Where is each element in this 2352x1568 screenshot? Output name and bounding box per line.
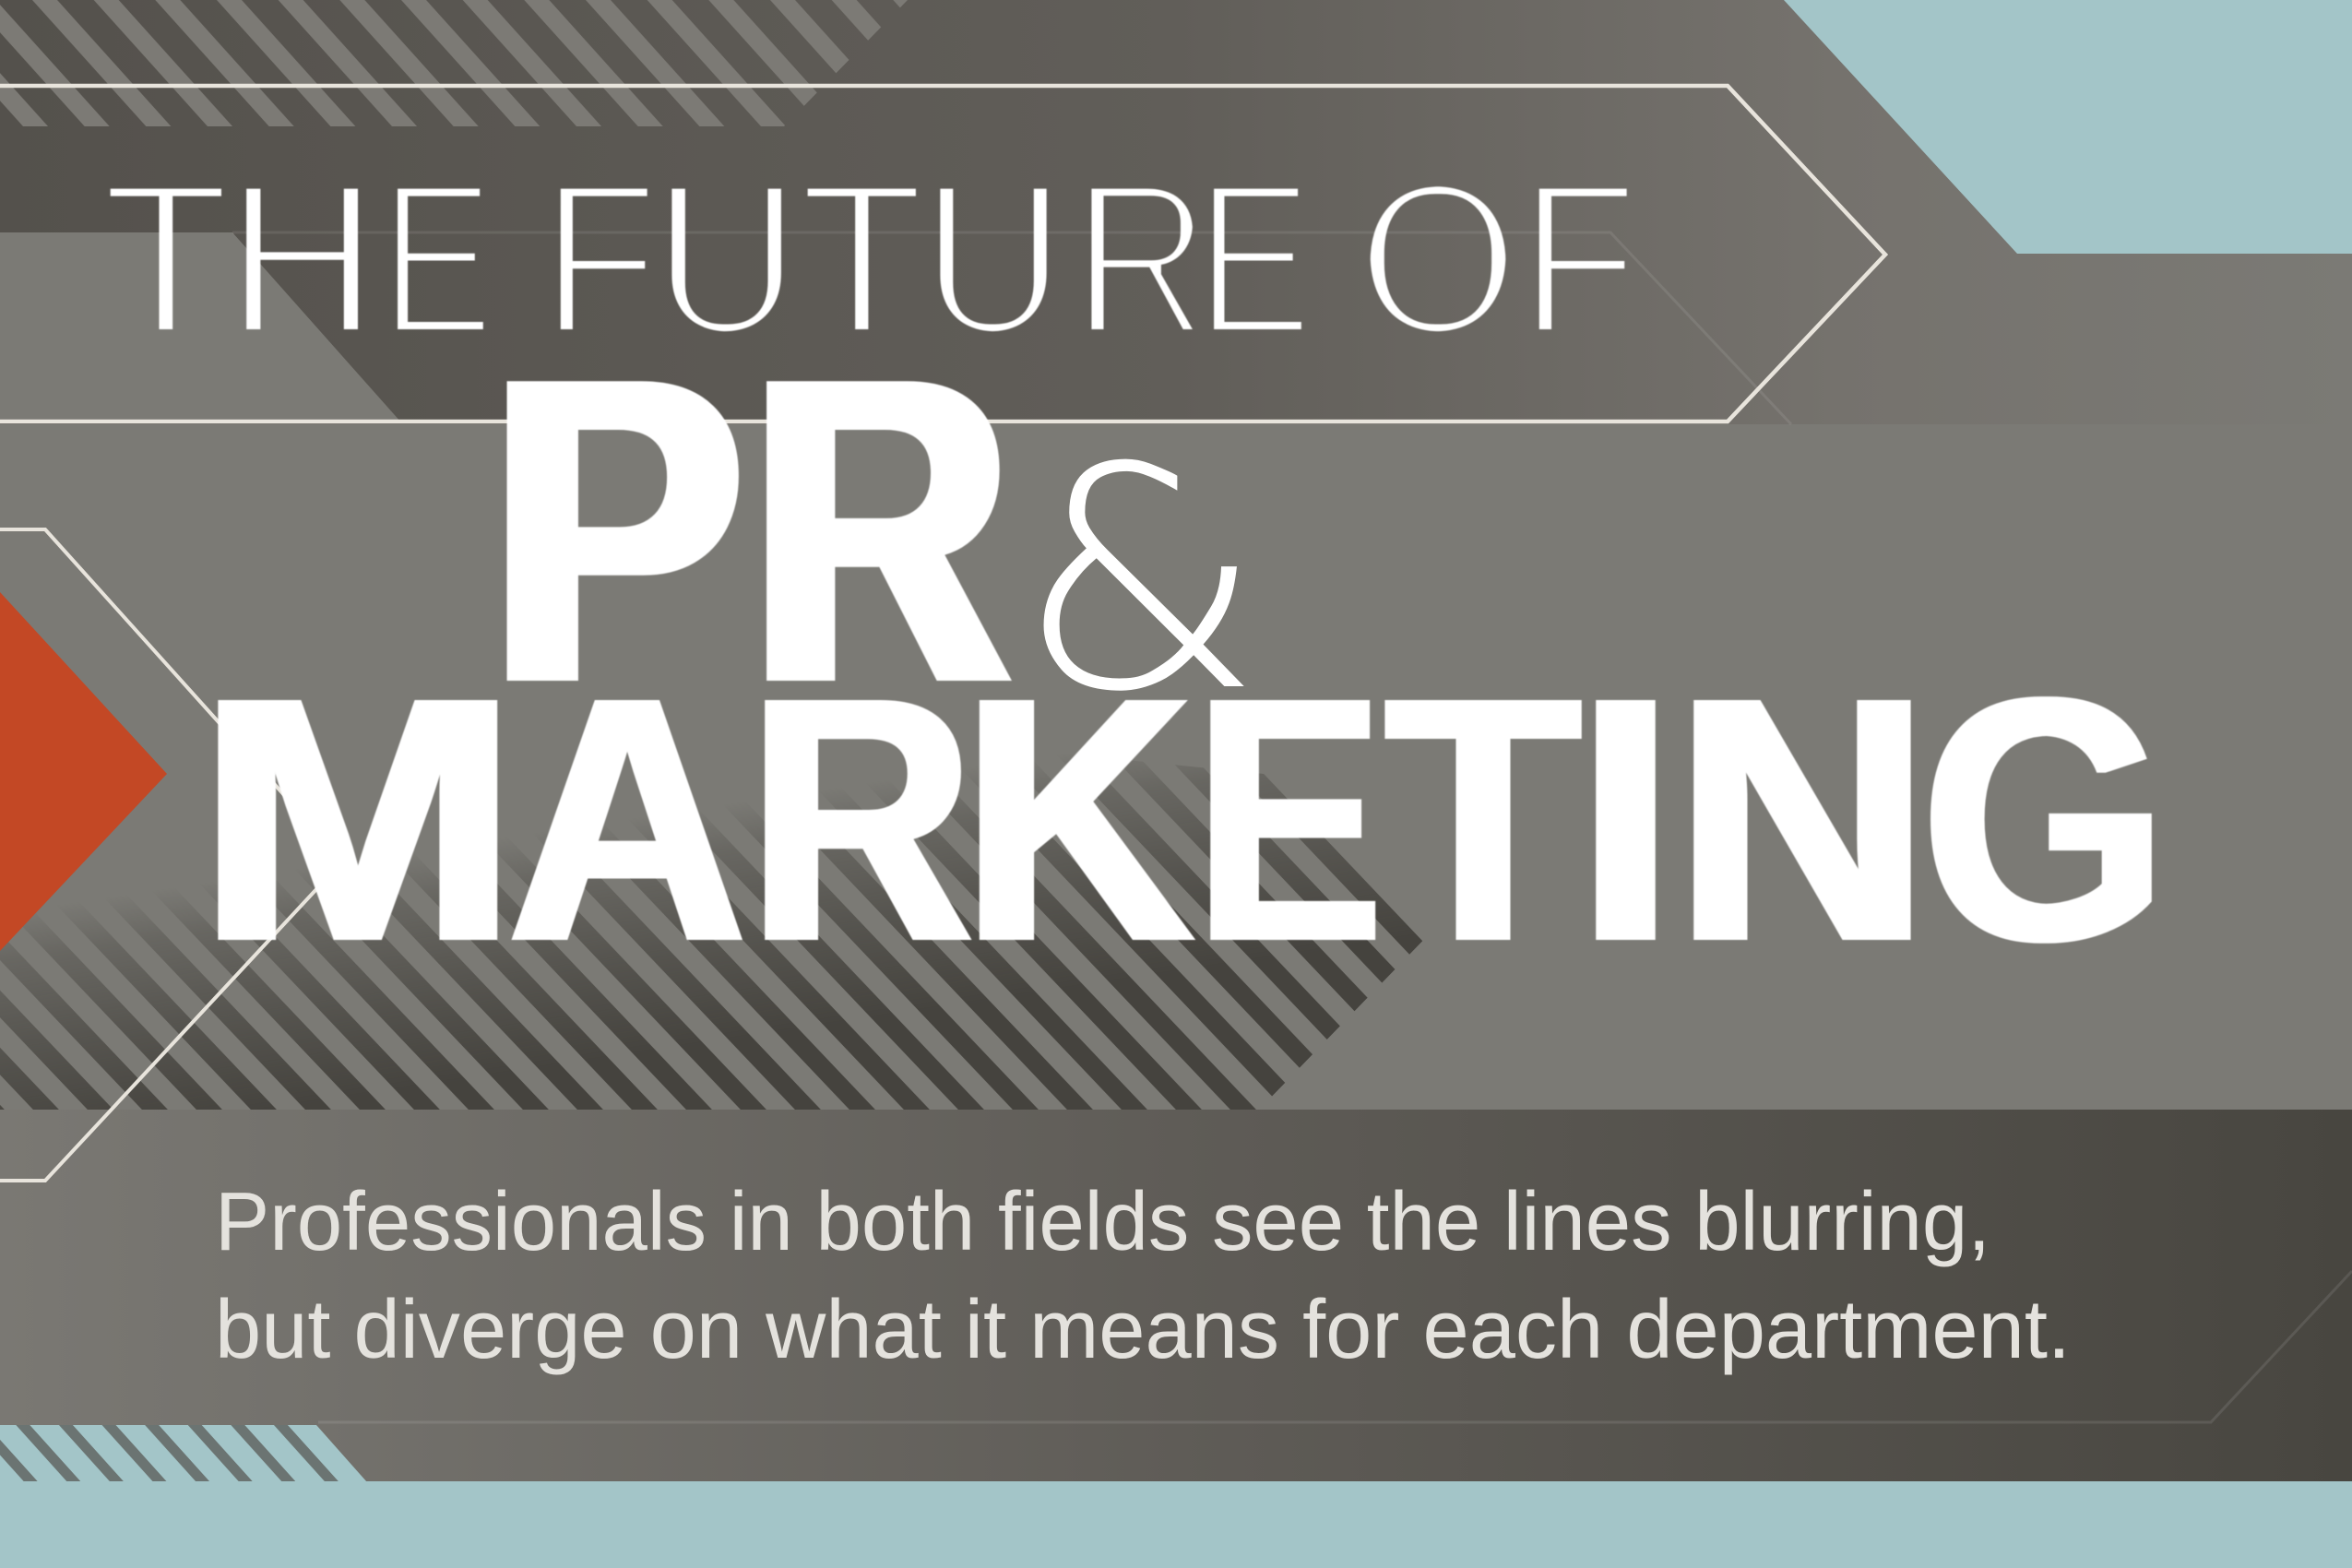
light grey wedge under top band [0,232,401,422]
top band [0,0,2352,424]
title line: the future of: H [227,137,378,381]
title line: the future of: E [381,137,493,381]
title line: the future of: F [1521,137,1637,381]
title [103,137,2168,1015]
teal corner top right [1784,0,2352,254]
title line: the future of: U [653,137,800,381]
title line: the future of: F [542,137,658,381]
title line: PR: P [490,288,743,774]
title line: marketing: I [1576,625,1675,1015]
title line: marketing: G [1922,625,2168,1015]
title line: the future of: E [1197,137,1312,381]
title line: the future of: R [1074,137,1209,381]
title line: the future of: O [1358,137,1518,381]
title ampersand: & [1016,403,1264,759]
title line: marketing: R [748,625,974,1015]
faint inner outline [232,232,1791,424]
title line: PR: R [751,288,1011,774]
faint outline [318,1271,2352,1422]
title line: marketing: K [962,625,1194,1015]
hatch: central stripes [0,762,1422,1110]
title line: marketing: M [196,625,519,1015]
arrow outline: top chevron [0,86,1885,422]
bottom band [0,1110,2352,1481]
hatch: top stripes [0,0,908,126]
title line: the future of: T [103,137,229,381]
title line: the future of: U [922,137,1064,381]
teal hatched tab [0,1425,367,1482]
subtitle text [215,1176,2071,1376]
title line: marketing: A [507,625,747,1015]
title line: marketing: T [1385,625,1581,1015]
title line: the future of: T [801,137,923,381]
subtitle line 1: Professionals in both fields see the lines blurring, [215,1176,1990,1268]
teal footer strip [0,1481,2352,1568]
subtitle line 2: but diverge on what it means for each department. [215,1284,2071,1376]
arrow outline: left chevron [0,529,343,1181]
title line: marketing: E [1195,625,1382,1015]
title line: marketing: N [1674,625,1930,1015]
red diamond [0,592,167,951]
